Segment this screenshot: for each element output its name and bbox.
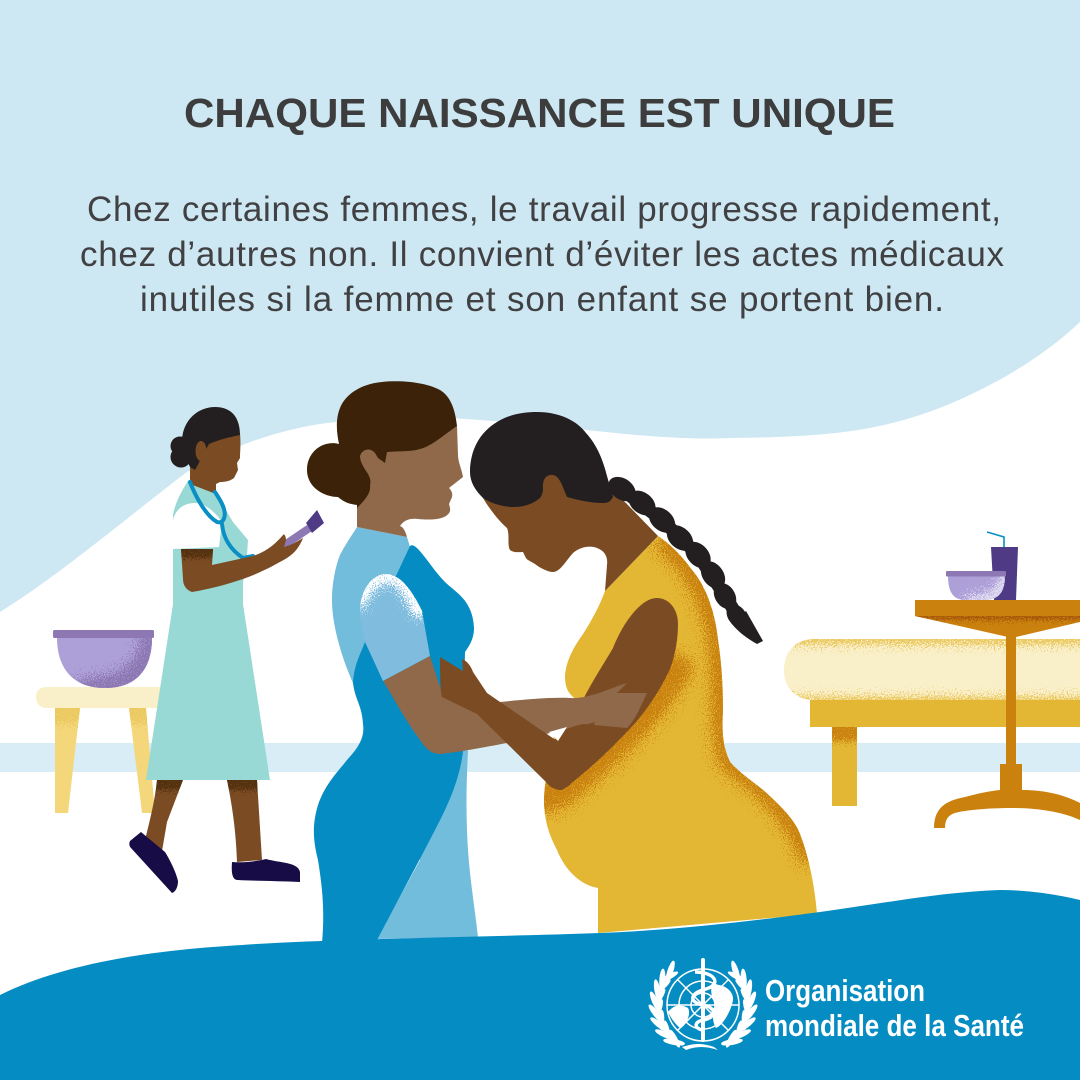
lilac bowl [53, 630, 154, 688]
continents [668, 985, 733, 1028]
midwife figure [307, 381, 478, 943]
midwife arm and hand [383, 656, 647, 754]
serpent [693, 972, 715, 1030]
stethoscope [190, 482, 253, 558]
woman hair [470, 412, 613, 507]
nurse shoes [129, 832, 300, 893]
nurse legs [146, 780, 262, 862]
midwife face and neck [357, 426, 463, 537]
ribbon [682, 1044, 718, 1050]
side table stand [934, 630, 1080, 828]
midwife dress blue [314, 545, 474, 943]
WHO wordmark: Organisation [765, 973, 925, 1008]
nurse arm [170, 534, 303, 592]
table base [810, 700, 1080, 727]
side table [905, 532, 1080, 828]
tablet device [260, 510, 324, 561]
cup with straw [987, 532, 1018, 600]
body text [80, 190, 1004, 319]
woman braid [604, 472, 763, 644]
midwife dress light [332, 527, 478, 939]
woman face and neck [483, 440, 658, 591]
stool with bowl [36, 630, 165, 813]
midwife hair [307, 381, 457, 508]
stool legs [55, 708, 154, 813]
nurse dress [146, 481, 270, 780]
nurse head [170, 407, 240, 494]
woman upper arm [540, 598, 678, 790]
small bowl [946, 571, 1006, 600]
side table top [905, 600, 1080, 637]
woman forearm and hand [440, 657, 595, 790]
WHO logo [647, 958, 1024, 1050]
staff [701, 958, 705, 1042]
body text: chez d’autres non. Il convient d’éviter les actes médicaux [80, 235, 1004, 274]
midwife sleeve [360, 574, 430, 681]
pregnant woman figure [470, 412, 822, 933]
nurse figure [129, 407, 324, 893]
stool top [36, 687, 165, 708]
bottom blue wave [0, 890, 1080, 1080]
body text: Chez certaines femmes, le travail progresse rapidement, [87, 190, 1001, 229]
WHO wordmark [765, 973, 1024, 1043]
wreath [647, 960, 759, 1049]
background: white wave room [0, 322, 1080, 1080]
floor stripe [0, 743, 1080, 772]
nurse sleeve [173, 503, 222, 549]
globe [667, 969, 739, 1041]
mattress [784, 639, 1080, 700]
massage table [784, 639, 1080, 806]
gap between arms [549, 727, 567, 741]
yellow dress [530, 530, 822, 933]
WHO emblem [647, 958, 759, 1050]
WHO wordmark: mondiale de la Santé [765, 1008, 1024, 1043]
title: CHAQUE NAISSANCE EST UNIQUE [184, 90, 895, 136]
table leg [832, 727, 857, 806]
body text: inutiles si la femme et son enfant se portent bien. [140, 280, 944, 319]
